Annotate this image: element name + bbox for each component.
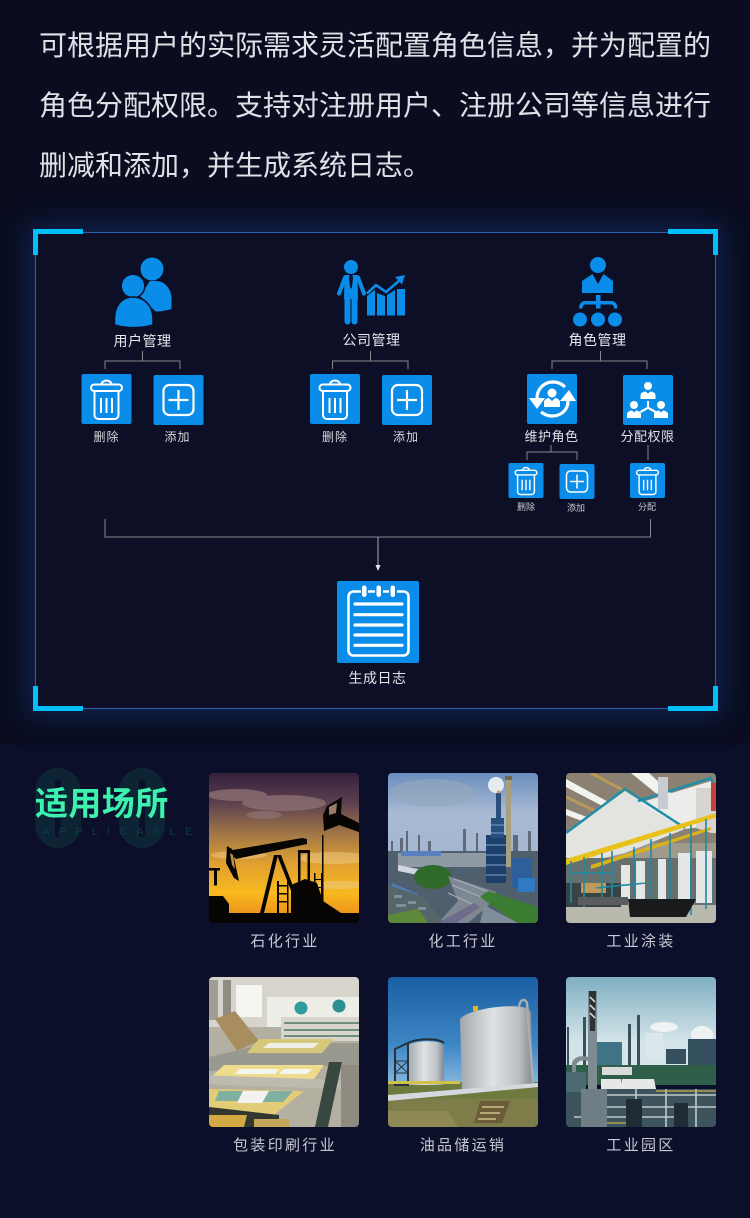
icon: company bbox=[339, 260, 405, 322]
corner brackets bbox=[33, 229, 718, 711]
photo: oil storage tanks bbox=[388, 977, 538, 1127]
icon: maintain role bbox=[527, 374, 577, 424]
photo: industrial park bbox=[566, 977, 716, 1127]
photo: chemical plant bbox=[388, 773, 538, 923]
label: small assign: 分配 bbox=[638, 502, 656, 512]
bracket connector bbox=[105, 519, 650, 537]
panel: lower section background bbox=[0, 745, 750, 1218]
icon: add bbox=[382, 375, 432, 425]
permission diagram bbox=[33, 229, 718, 711]
label: assign permissions: 分配权限 bbox=[620, 429, 675, 444]
intro text: 删减和添加，并生成系统日志。 bbox=[39, 150, 431, 181]
label: delete: 删除 bbox=[322, 429, 348, 444]
decorative ghost numeral bbox=[119, 768, 165, 848]
label: role management: 角色管理 bbox=[568, 332, 626, 348]
label: company management: 公司管理 bbox=[342, 332, 400, 348]
photo: oil pump at sunset bbox=[209, 773, 359, 923]
caption: 工业涂装 bbox=[606, 933, 676, 950]
caption: 包装印刷行业 bbox=[233, 1137, 337, 1154]
label: small add: 添加 bbox=[567, 503, 585, 513]
decorative ghost numeral bbox=[35, 768, 81, 848]
label: delete: 删除 bbox=[93, 429, 120, 444]
label: add: 添加 bbox=[164, 430, 191, 444]
label: generate log: 生成日志 bbox=[348, 670, 406, 686]
label: maintain role: 维护角色 bbox=[524, 429, 579, 444]
icon: delete bbox=[82, 374, 132, 424]
photo: packaging printing bbox=[209, 977, 359, 1127]
arrow bbox=[376, 537, 380, 571]
heading: applicable scenarios: 适用场所 bbox=[35, 785, 169, 822]
caption: 工业园区 bbox=[606, 1137, 676, 1154]
icon: log notepad bbox=[337, 581, 419, 663]
label: user management: 用户管理 bbox=[114, 333, 172, 349]
subheading: APPLICABLE bbox=[42, 826, 201, 838]
icon: small assign bbox=[630, 463, 665, 498]
label: add: 添加 bbox=[393, 430, 419, 444]
icon: add bbox=[154, 375, 204, 425]
connector: company management bbox=[332, 351, 408, 369]
caption: 石化行业 bbox=[250, 933, 320, 950]
connector: maintain role bbox=[527, 445, 577, 460]
connector: role management bbox=[552, 351, 647, 369]
intro text: 可根据用户的实际需求灵活配置角色信息，并为配置的 bbox=[39, 30, 711, 61]
photo: industrial coating line bbox=[566, 773, 716, 923]
intro text: 角色分配权限。支持对注册用户、注册公司等信息进行 bbox=[39, 90, 711, 121]
icon: assign permissions bbox=[623, 375, 673, 425]
intro text bbox=[39, 30, 711, 181]
connector: assign permissions bbox=[647, 445, 649, 460]
label: small delete: 删除 bbox=[517, 501, 535, 512]
icon: users bbox=[114, 258, 172, 328]
caption: 油品储运销 bbox=[420, 1137, 506, 1154]
icon: delete bbox=[310, 374, 360, 424]
panel: permission diagram frame bbox=[35, 232, 716, 709]
icon: role hierarchy bbox=[573, 257, 622, 326]
connector: user management bbox=[105, 351, 180, 369]
caption: 化工行业 bbox=[428, 933, 498, 950]
icon: small delete bbox=[508, 463, 544, 498]
icon: small add bbox=[560, 464, 594, 499]
